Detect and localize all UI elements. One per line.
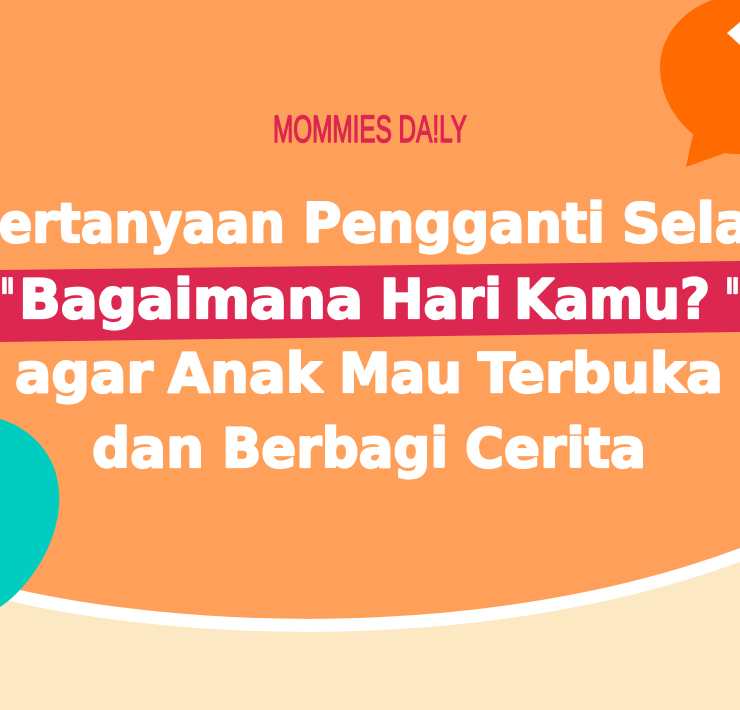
icon: white diamond in bubble [727, 22, 740, 45]
heading line 4 [92, 417, 646, 480]
highlight band [0, 261, 740, 342]
heading line 2: Bagaimana [19, 268, 363, 331]
heading line 4: Cerita [465, 417, 646, 480]
heading line 3 [15, 342, 723, 405]
heading line 1: Pengganti [303, 192, 605, 255]
heading line 1 [0, 192, 740, 255]
heading line 3: Anak [168, 342, 323, 405]
heading line 3: Mau [339, 342, 462, 405]
heading line 3: Terbuka [478, 342, 723, 405]
panel: cream footer [0, 555, 740, 710]
logo: Mommies Daily: MOMMIES DA!LY [273, 109, 467, 151]
heading line 3: agar [15, 342, 153, 405]
white curved divider [0, 547, 740, 625]
icon: orange speech bubble [660, 0, 740, 167]
icon: teal blob [0, 419, 59, 607]
heading line 2 [0, 268, 740, 331]
heading line 2: " [0, 268, 15, 331]
heading line 2: Hari [380, 268, 502, 331]
heading line 4: Berbagi [222, 417, 448, 480]
heading line 2: Kamu? [514, 268, 710, 331]
heading line 4: dan [92, 417, 204, 480]
